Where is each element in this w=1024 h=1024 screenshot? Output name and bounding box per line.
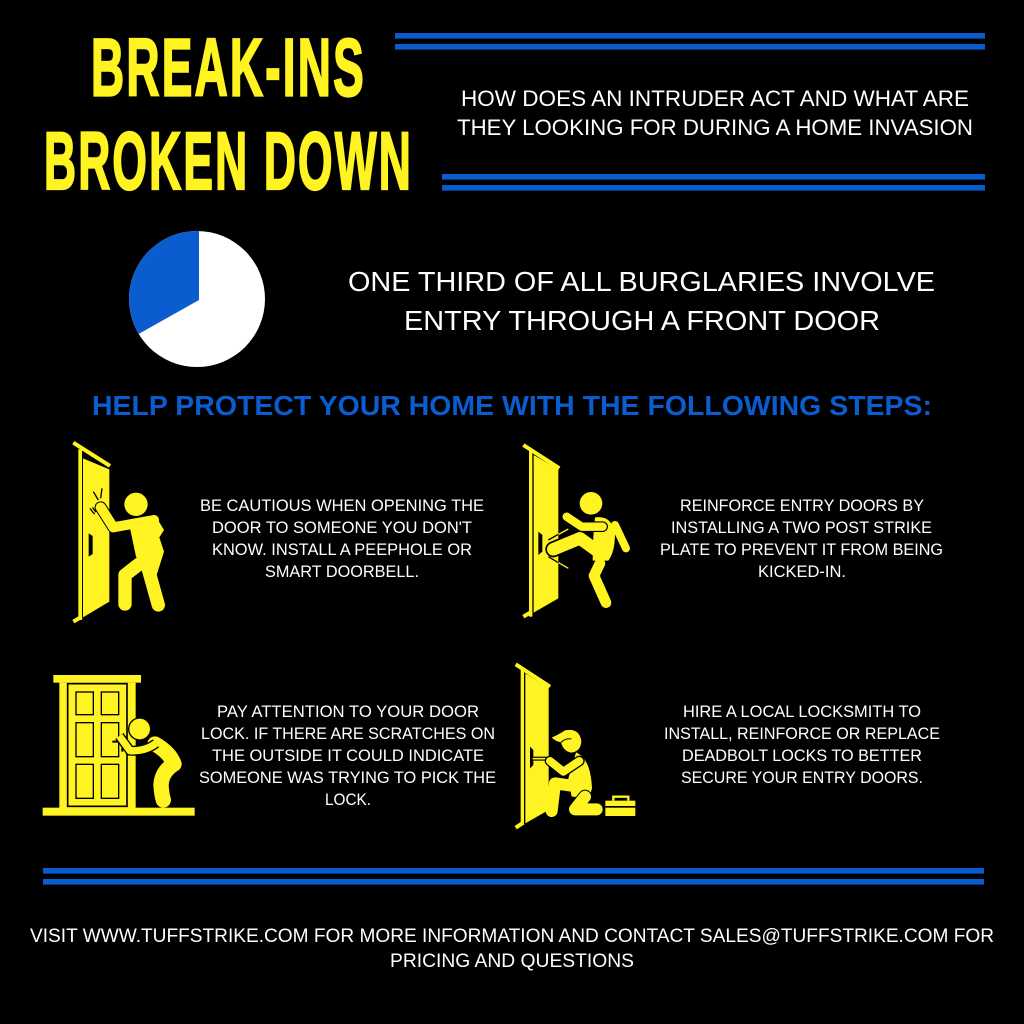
step 4 text (664, 703, 940, 787)
title: BROKEN DOWN (44, 116, 413, 207)
footer text: PRICING AND QUESTIONS (390, 951, 634, 972)
subtitle (457, 86, 973, 140)
step 2 text (660, 497, 943, 581)
step 1 text: SMART DOORBELL. (265, 563, 419, 581)
step 1 text: KNOW. INSTALL A PEEPHOLE OR (212, 541, 472, 559)
step 2 text: INSTALLING A TWO POST STRIKE (671, 519, 932, 537)
title (44, 23, 413, 207)
step 4 text: HIRE A LOCAL LOCKSMITH TO (683, 703, 921, 721)
statistic text: ENTRY THROUGH A FRONT DOOR (404, 305, 880, 336)
statistic text (348, 266, 935, 336)
step 2 text: KICKED-IN. (758, 563, 846, 581)
icon: person knocking on door (73, 443, 164, 622)
lower double rule (442, 174, 985, 191)
step 3 text: SOMEONE WAS TRYING TO PICK THE (199, 769, 496, 787)
icon: person kicking door (523, 445, 626, 617)
step 1 text: DOOR TO SOMEONE YOU DON'T (212, 519, 472, 537)
bottom double rule (43, 868, 984, 885)
footer text: VISIT WWW.TUFFSTRIKE.COM FOR MORE INFORMATION AND CONTACT SALES@TUFFSTRIKE.COM FOR (30, 926, 994, 947)
step 4 text: SECURE YOUR ENTRY DOORS. (681, 769, 923, 787)
step 2 text: REINFORCE ENTRY DOORS BY (680, 497, 924, 515)
step 3 text (199, 703, 496, 809)
step 1 text (200, 497, 484, 581)
icon: locksmith kneeling at door with toolbox (516, 664, 635, 828)
top double rule (395, 33, 985, 50)
subtitle: THEY LOOKING FOR DURING A HOME INVASION (457, 115, 973, 140)
step 4 text: DEADBOLT LOCKS TO BETTER (682, 747, 922, 765)
step 3 text: LOCK. (325, 791, 371, 809)
section heading: HELP PROTECT YOUR HOME WITH THE FOLLOWING STEPS: (92, 390, 932, 421)
step 2 text: PLATE TO PREVENT IT FROM BEING (660, 541, 943, 559)
pie chart: one third (129, 231, 265, 367)
step 3 text: LOCK. IF THERE ARE SCRATCHES ON (201, 725, 495, 743)
statistic text: ONE THIRD OF ALL BURGLARIES INVOLVE (348, 266, 935, 297)
step 1 text: BE CAUTIOUS WHEN OPENING THE (200, 497, 484, 515)
step 4 text: INSTALL, REINFORCE OR REPLACE (664, 725, 940, 743)
subtitle: HOW DOES AN INTRUDER ACT AND WHAT ARE (461, 86, 969, 111)
title: BREAK-INS (91, 23, 366, 114)
icon: person picking door lock (43, 675, 195, 816)
footer text (30, 926, 994, 972)
step 3 text: THE OUTSIDE IT COULD INDICATE (212, 747, 484, 765)
step 3 text: PAY ATTENTION TO YOUR DOOR (217, 703, 479, 721)
